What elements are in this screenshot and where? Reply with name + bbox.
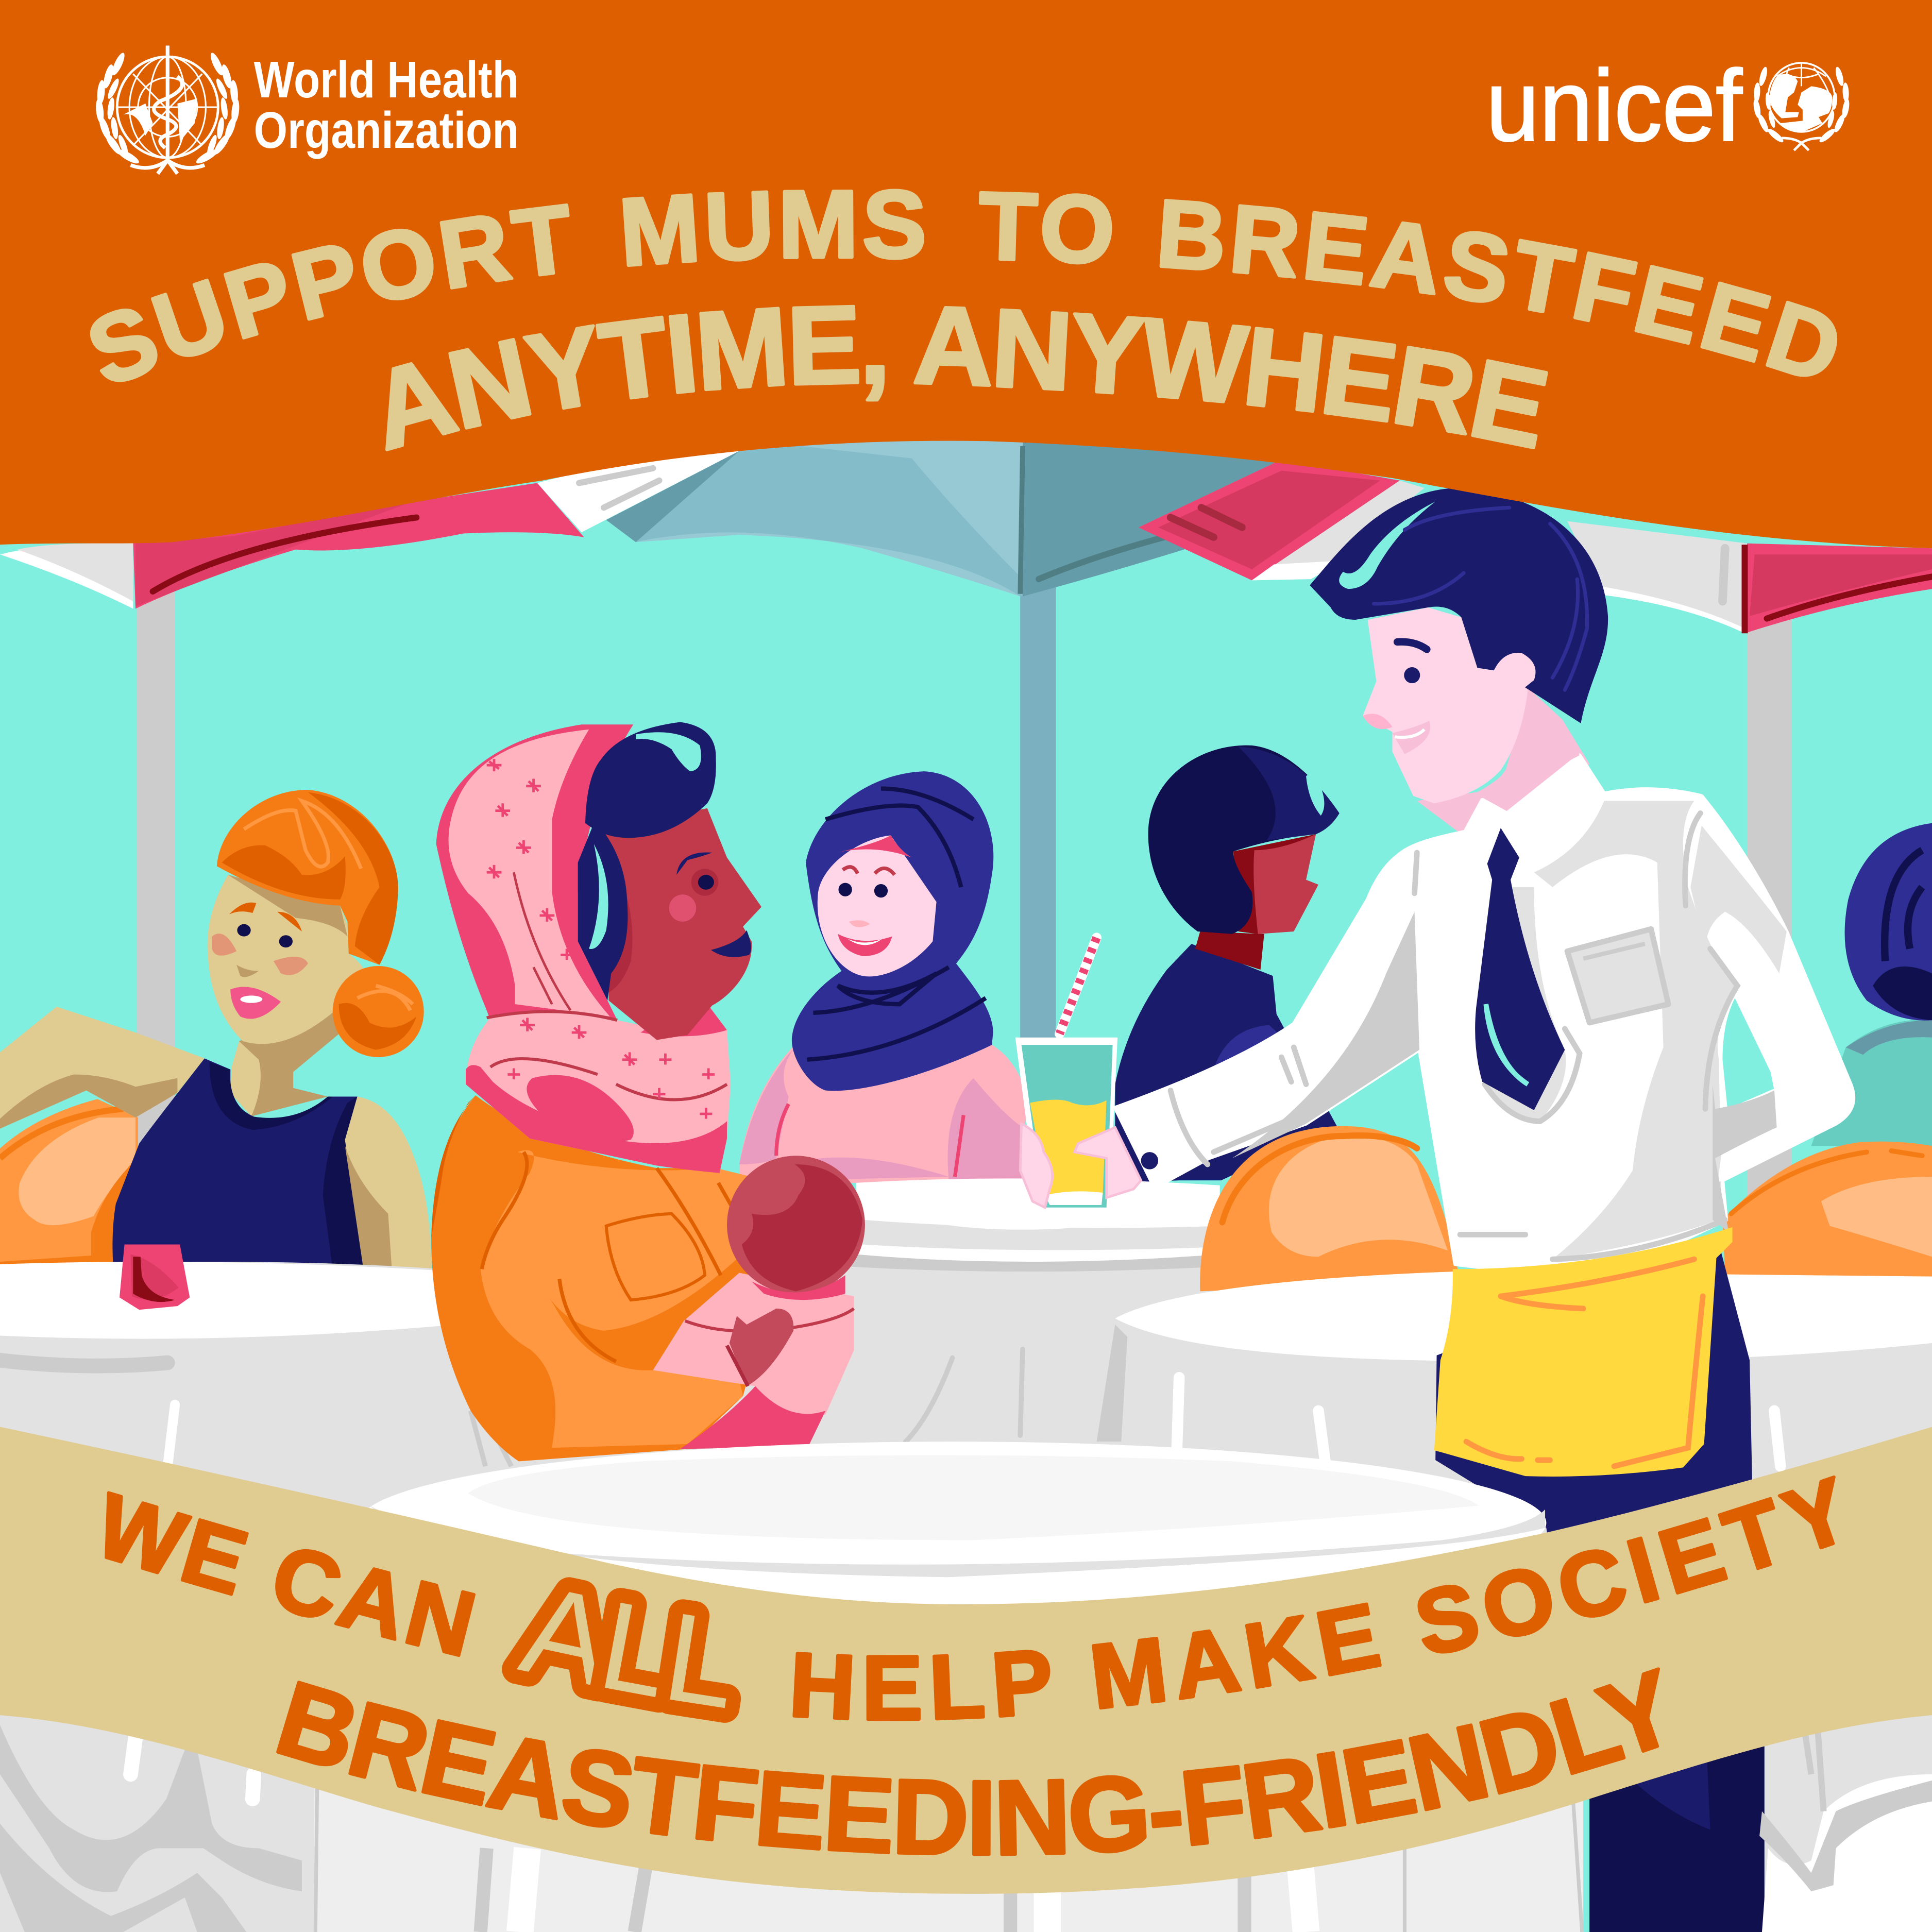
scarf wrap: [466, 1011, 731, 1173]
scarf hood: [436, 724, 633, 1020]
person: mother with baby: [431, 722, 865, 1461]
chair: left orange: [0, 1099, 138, 1269]
WHO name: World Health: [254, 51, 519, 109]
lower tablecloths: [0, 1602, 1932, 1932]
banner message: we can all help make society breastfeeding-friendly: HELP MAKE SOCIETY: [792, 1476, 1836, 1721]
hair: [1148, 745, 1340, 934]
banner message: we can all help make society breastfeeding-friendly: [105, 1476, 1836, 1856]
face: [1233, 834, 1318, 934]
hair bun: [333, 966, 424, 1057]
jacket pocket: [606, 1214, 705, 1300]
collar: [1465, 755, 1604, 880]
neck: [230, 1004, 345, 1116]
hijab: [792, 771, 993, 1091]
UNICEF logo: [1486, 49, 1851, 162]
person: seated hijab woman: [739, 771, 1028, 1183]
table: front round tabletop: [359, 1442, 1546, 1604]
table: back centre: [813, 1178, 1220, 1479]
face: [601, 808, 761, 1040]
arm raised: [0, 1007, 205, 1129]
neck: [1195, 931, 1264, 970]
banner message: we can all help make society breastfeeding-friendly: ALL: [502, 1577, 741, 1723]
icon: UNICEF emblem: [1752, 63, 1851, 150]
person: waiter: [1020, 488, 1854, 1848]
person: right background guest: [1811, 823, 1932, 1146]
jacket: [431, 1095, 789, 1461]
WHO logo: [95, 45, 519, 174]
shirt pocket: [1567, 929, 1668, 1023]
hair: [585, 722, 716, 838]
facial features: [676, 853, 712, 875]
cuff button: [1141, 1152, 1158, 1170]
right arm: [345, 1097, 431, 1269]
hair: [217, 790, 398, 965]
umbrella poles: [137, 579, 1791, 1257]
tie: [1475, 828, 1565, 1110]
UNICEF name: unicef: [1486, 49, 1742, 162]
body: [739, 1045, 1028, 1183]
neck: [1417, 690, 1589, 838]
glass of lemonade: [1015, 938, 1117, 1216]
title: support mums to breastfeed anytime, anywhere: SUPPORT MUMS TO BREASTFEED: [90, 189, 1837, 382]
shirt: [1115, 755, 1854, 1281]
table: left: [0, 1262, 862, 1725]
person: red-haired woman: [0, 790, 431, 1269]
trousers: [1435, 1248, 1752, 1750]
icon: WHO emblem: [95, 45, 240, 174]
title: support mums to breastfeed anytime, anywhere: ANYTIME, ANYWHERE: [385, 305, 1548, 451]
baby body: [653, 1273, 854, 1416]
banner message: we can all help make society breastfeeding-friendly: BREASTFEEDING-FRIENDLY: [276, 1667, 1660, 1856]
person: back-facing man: [1115, 745, 1340, 1183]
mother's hand: [730, 1309, 793, 1386]
baby head: [727, 1156, 865, 1294]
scarf flower pattern: [487, 759, 715, 1151]
face: [818, 835, 937, 976]
banner message: we can all help make society breastfeeding-friendly: WE CAN: [105, 1491, 476, 1657]
ear: [1494, 653, 1536, 690]
facial features: [229, 903, 302, 931]
bottom banner shape: [0, 1427, 1932, 1894]
WHO logo: Organization: [254, 101, 519, 159]
pole base: [120, 1244, 190, 1310]
dress: [112, 1058, 364, 1269]
table: right: [1084, 1272, 1932, 1725]
hair: [1310, 488, 1608, 723]
chair: far right orange: [1722, 1142, 1932, 1287]
top banner shape: [0, 0, 1932, 548]
hand: [1074, 1127, 1141, 1198]
chair: centre right orange: [1200, 1126, 1460, 1291]
jacket: [1115, 944, 1337, 1183]
apron: [1434, 1227, 1733, 1477]
face: [1363, 607, 1528, 803]
canopy: umbrellas: [0, 437, 1932, 633]
face: [208, 875, 367, 1044]
